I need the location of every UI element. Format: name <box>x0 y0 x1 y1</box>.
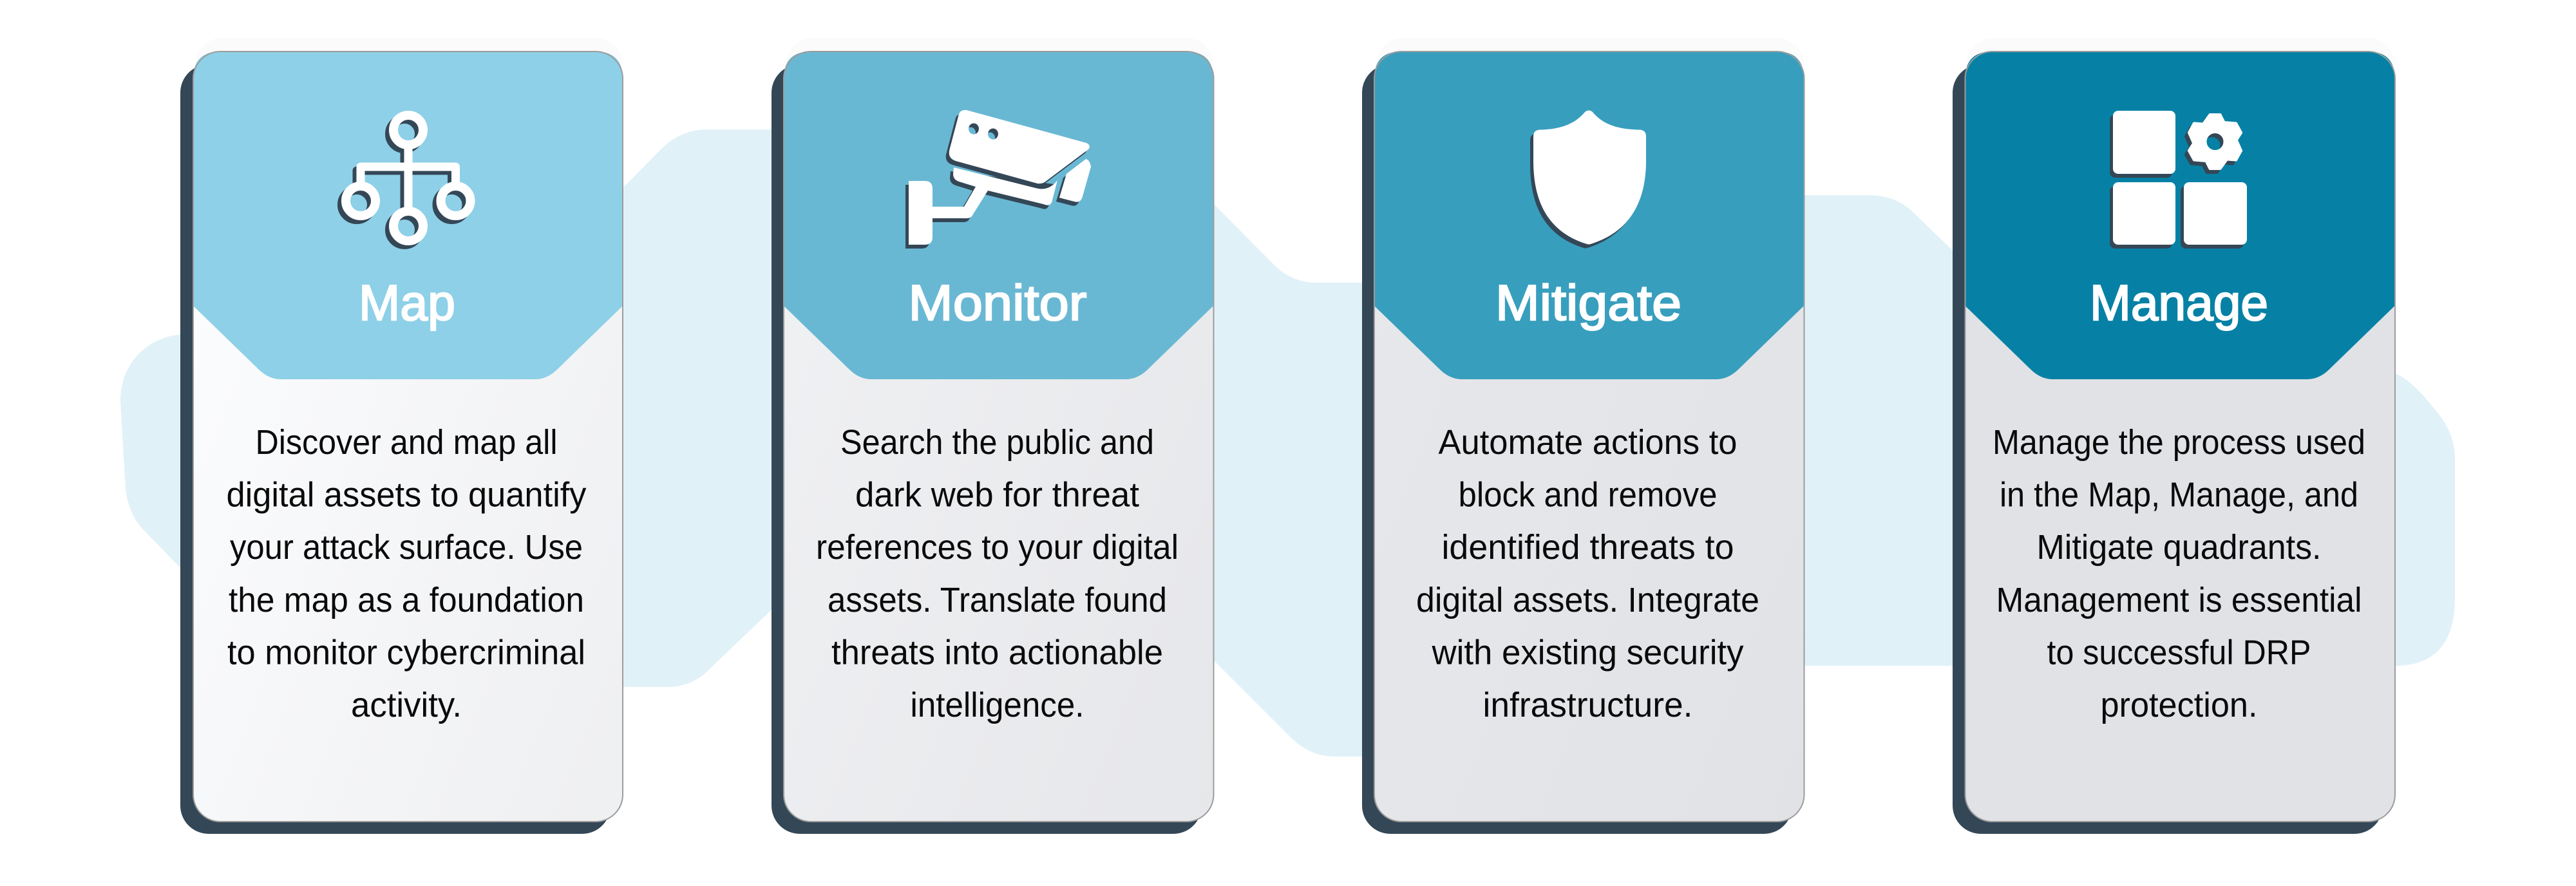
text: monitor description: references to your digital <box>816 528 1179 567</box>
icon: blocks and gear <box>2110 111 2247 249</box>
text: map description: your attack surface. Use <box>230 528 583 567</box>
background blob <box>120 129 2455 757</box>
title: mitigate: Mitigate <box>1495 274 1681 331</box>
text: manage description: in the Map, Manage, and <box>2000 476 2358 514</box>
text: mitigate description: Automate actions to <box>1439 423 1738 462</box>
text: monitor description: assets. Translate found <box>828 581 1167 619</box>
text: monitor description: dark web for threat <box>855 476 1139 514</box>
text: monitor description: threats into actionable <box>831 633 1163 672</box>
header: mitigate <box>1374 52 1804 379</box>
text: monitor description: intelligence. <box>911 686 1084 724</box>
text: manage description: Management is essential <box>1996 581 2362 619</box>
header: map <box>193 52 623 379</box>
text: mitigate description <box>1416 423 1759 724</box>
text: manage description: Manage the process used <box>1993 423 2365 462</box>
title: manage: Manage <box>2090 274 2268 331</box>
icon: security camera <box>905 110 1091 249</box>
panel: monitor <box>772 38 1213 834</box>
text: manage description: Mitigate quadrants. <box>2036 528 2321 567</box>
header: monitor <box>784 52 1213 379</box>
icon: network map <box>342 115 470 245</box>
text: monitor description <box>816 423 1179 724</box>
text: map description <box>227 423 586 724</box>
text: manage description: protection. <box>2101 686 2258 724</box>
text: mitigate description: digital assets. Integrate <box>1416 581 1759 619</box>
text: map description: activity. <box>351 686 462 724</box>
text: mitigate description: with existing security <box>1432 633 1744 672</box>
title: monitor: Monitor <box>908 274 1087 331</box>
text: manage description <box>1993 423 2365 724</box>
text: manage description: to successful DRP <box>2047 633 2311 672</box>
text: mitigate description: identified threats to <box>1441 528 1734 567</box>
text: mitigate description: infrastructure. <box>1482 686 1692 724</box>
header: manage <box>1965 52 2394 379</box>
panel: manage <box>1953 38 2395 834</box>
text: map description: digital assets to quantify <box>227 476 586 514</box>
panel: mitigate <box>1362 38 1804 834</box>
text: map description: to monitor cybercriminal <box>227 633 585 672</box>
text: map description: Discover and map all <box>255 423 558 462</box>
text: monitor description: Search the public and <box>840 423 1154 462</box>
icon: shield <box>1530 111 1646 249</box>
text: mitigate description: block and remove <box>1458 476 1717 514</box>
panel: map <box>180 38 623 834</box>
text: map description: the map as a foundation <box>229 581 584 619</box>
title: map: Map <box>359 274 455 331</box>
